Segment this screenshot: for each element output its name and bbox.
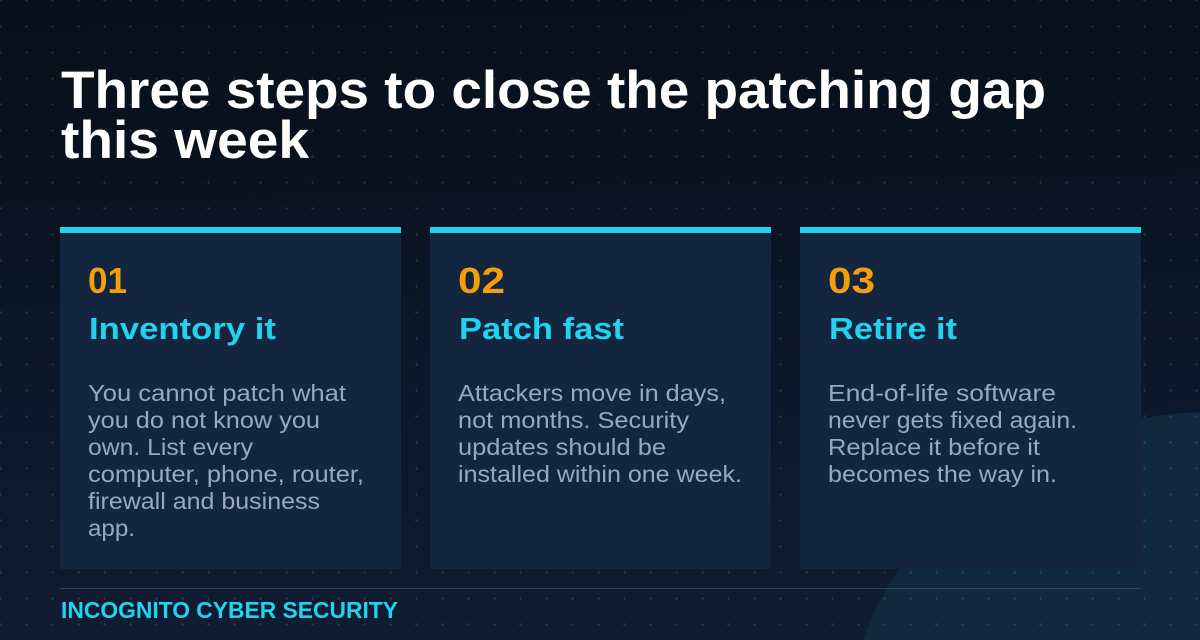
panel: step 03 retire it xyxy=(800,227,1141,569)
step body text 01: app. xyxy=(88,515,135,541)
step body text 02: installed within one week. xyxy=(458,461,742,487)
step body text 01: computer, phone, router, xyxy=(88,461,364,487)
step number 03: 03 xyxy=(828,260,875,301)
title xyxy=(61,61,1046,170)
step body text 02: Attackers move in days, xyxy=(458,380,726,406)
step heading: Retire it: Retire it xyxy=(829,311,957,346)
panel: step 01 inventory it xyxy=(60,227,401,569)
step body text 02: updates should be xyxy=(458,434,666,460)
step body text 03: End-of-life software xyxy=(828,380,1056,406)
card accent bar 01 xyxy=(60,227,401,233)
step body text 03 xyxy=(828,380,1077,487)
panel: step 02 patch fast xyxy=(430,227,771,569)
step body text 02: not months. Security xyxy=(458,407,689,433)
footer brand: INCOGNITO CYBER SECURITY xyxy=(61,597,398,623)
step heading: Patch fast: Patch fast xyxy=(459,311,624,346)
decorative circle: bottom right xyxy=(863,412,1200,640)
step body text 02 xyxy=(458,380,742,487)
step body text 01: own. List every xyxy=(88,434,253,460)
step body text 01 xyxy=(88,380,364,541)
step heading: Inventory it: Inventory it xyxy=(89,311,276,346)
step number 02: 02 xyxy=(458,260,505,301)
step body text 01: You cannot patch what xyxy=(88,380,347,406)
step body text 03: becomes the way in. xyxy=(828,461,1057,487)
step body text 01: firewall and business xyxy=(88,488,320,514)
card accent bar 03 xyxy=(800,227,1141,233)
step body text 01: you do not know you xyxy=(88,407,320,433)
title: Three steps to close the patching gap xyxy=(61,61,1046,120)
step body text 03: never gets fixed again. xyxy=(828,407,1077,433)
step body text 03: Replace it before it xyxy=(828,434,1040,460)
step number 01: 01 xyxy=(88,260,127,301)
title: this week xyxy=(61,111,310,170)
card accent bar 02 xyxy=(430,227,771,233)
